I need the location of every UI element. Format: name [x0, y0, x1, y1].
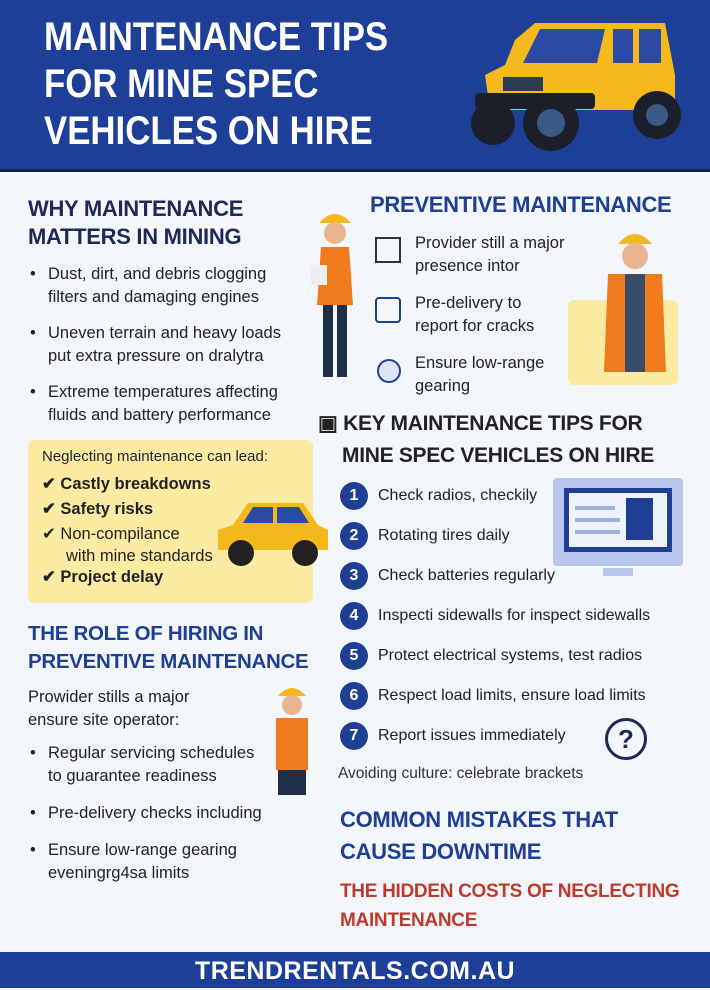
numbered list: Protect electrical systems, test radios: [378, 647, 642, 664]
callout: neglecting maintenance: with mine standards: [66, 547, 213, 565]
section: key tips: MINE SPEC VEHICLES ON HIRE: [342, 444, 654, 467]
heading: common mistakes: COMMON MISTAKES THAT: [340, 807, 618, 832]
title: MAINTENANCE TIPS: [44, 15, 388, 59]
section: why maintenance matters: [28, 196, 281, 424]
footer: TRENDRENTALS.COM.AU: [195, 957, 515, 985]
section: preventive maintenance: gearing: [415, 377, 470, 395]
section: role of hiring: [28, 622, 308, 882]
numbered list: 3: [350, 567, 358, 584]
callout: neglecting maintenance: ✔ Safety risks: [42, 500, 153, 518]
numbered list: 4: [350, 607, 358, 624]
icon: male worker: [568, 300, 678, 385]
section: role of hiring: ensure site operator:: [28, 711, 179, 729]
numbered list: 2: [350, 527, 358, 544]
heading: common mistakes: [340, 807, 618, 864]
icon: question bubble: [605, 718, 647, 760]
heading: hidden costs: [340, 881, 679, 931]
icon: female worker: [311, 214, 353, 377]
bullet list: •: [30, 265, 36, 283]
title: FOR MINE SPEC: [44, 62, 319, 106]
bullet list: Dust, dirt, and debris clogging filters and damaging engines: [48, 265, 266, 306]
heading: WHY MAINTENANCE: [28, 196, 243, 221]
section: role of hiring: Pre-delivery checks including: [48, 804, 262, 822]
section: preventive maintenance: Pre-delivery to: [415, 294, 521, 312]
icon: yellow SUV: [471, 23, 681, 151]
section: preventive maintenance: Ensure low-range: [415, 354, 544, 372]
section: preventive maintenance: Provider still a major: [415, 234, 564, 252]
header banner: [0, 0, 710, 172]
heading: THE ROLE OF HIRING IN: [28, 622, 263, 645]
numbered list: Check batteries regularly: [378, 567, 555, 584]
numbered list: Respect load limits, ensure load limits: [378, 687, 646, 704]
numbered list: 1: [350, 487, 358, 504]
bullet list: •: [30, 383, 36, 401]
title: [44, 15, 388, 153]
callout: neglecting maintenance: ✔ Castly breakdowns: [42, 475, 211, 493]
heading: hidden costs: MAINTENANCE: [340, 910, 477, 931]
callout: neglecting maintenance: ✔ Non-compilance: [42, 525, 180, 543]
heading: MATTERS IN MINING: [28, 224, 241, 249]
numbered list: 6: [350, 687, 358, 704]
numbered list: Check radios, checkily: [378, 487, 537, 504]
numbered list: Rotating tires daily: [378, 527, 510, 544]
footer: [0, 952, 710, 988]
section: role of hiring: to guarantee readiness: [48, 767, 217, 785]
heading: hidden costs: THE HIDDEN COSTS OF NEGLECTING: [340, 881, 679, 902]
section: preventive maintenance: [370, 192, 671, 395]
section: preventive maintenance: PREVENTIVE MAINTENANCE: [370, 192, 671, 217]
section: role of hiring: •: [30, 744, 36, 762]
bullet list: •: [30, 324, 36, 342]
icon: question bubble: ?: [618, 724, 634, 754]
section: role of hiring: eveningrg4sa limits: [48, 864, 189, 882]
heading: PREVENTIVE MAINTENANCE: [28, 650, 308, 673]
heading: [28, 622, 308, 673]
section: key tips: Avoiding culture: celebrate brackets: [338, 765, 583, 782]
title: VEHICLES ON HIRE: [44, 109, 373, 153]
section: role of hiring: •: [30, 804, 36, 822]
bullet list: [30, 265, 281, 424]
section: role of hiring: Ensure low-range gearing: [48, 841, 237, 859]
icon: yellow car: [218, 503, 328, 566]
numbered list: [340, 482, 650, 750]
section: preventive maintenance: report for cracks: [415, 317, 534, 335]
section: role of hiring: •: [30, 841, 36, 859]
numbered list: 7: [350, 727, 358, 744]
section: role of hiring: Prowider stills a major: [28, 688, 189, 706]
icon: monitor: [553, 478, 683, 576]
section: key tips: [318, 412, 654, 782]
callout: neglecting maintenance: [28, 440, 313, 603]
icon: worker small: [276, 688, 308, 795]
section: role of hiring: Regular servicing schedules: [48, 744, 254, 762]
numbered list: Inspecti sidewalls for inspect sidewalls: [378, 607, 650, 624]
heading: common mistakes: CAUSE DOWNTIME: [340, 839, 541, 864]
callout: neglecting maintenance: Neglecting maintenance can lead:: [42, 448, 268, 465]
numbered list: Report issues immediately: [378, 727, 566, 744]
section: key tips: ▣ KEY MAINTENANCE TIPS FOR: [318, 412, 642, 435]
bullet list: Uneven terrain and heavy loads put extra pressure on dralytra: [48, 324, 281, 365]
callout: neglecting maintenance: ✔ Project delay: [42, 568, 163, 586]
numbered list: 5: [350, 647, 358, 664]
bullet list: Extreme temperatures affecting fluids and battery performance: [48, 383, 278, 424]
heading: [28, 196, 243, 249]
section: preventive maintenance: presence intor: [415, 257, 520, 275]
